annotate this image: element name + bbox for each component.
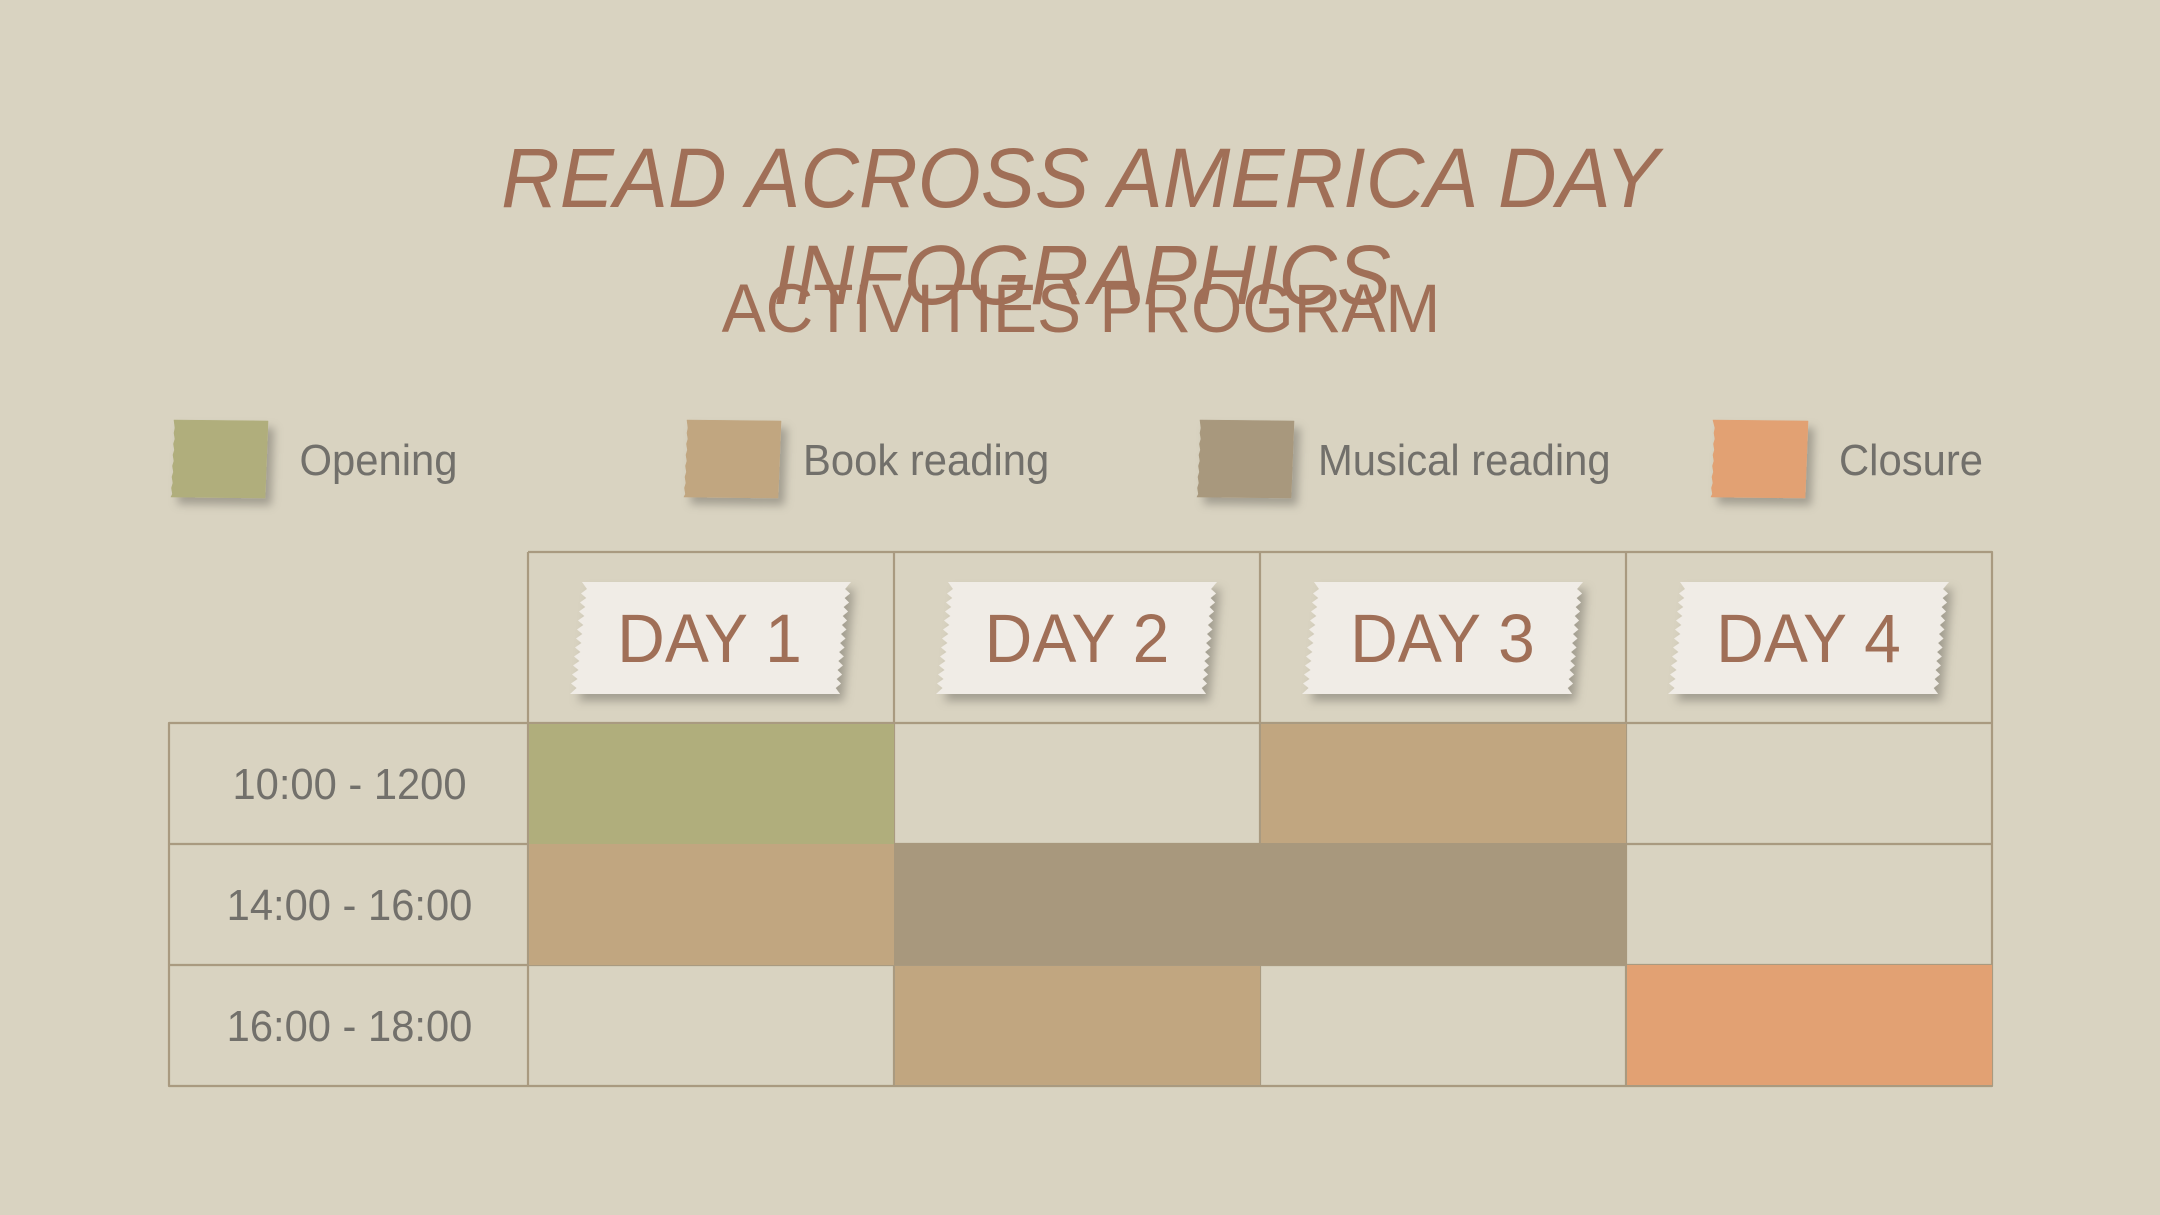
day 4 header: [1668, 582, 1949, 694]
legend: [171, 420, 1983, 498]
legend item: Opening: Opening: [300, 436, 457, 485]
day 2 header: [936, 582, 1217, 694]
legend item: Opening: [171, 420, 457, 498]
cell: day 2 book reading: [895, 966, 1260, 1085]
day 3 header: [1302, 582, 1583, 694]
table grid: [169, 552, 1992, 1086]
activity cells: [529, 724, 1992, 1085]
time labels: 10:00 - 1200: [232, 760, 467, 809]
legend item: Closure: Closure: [1839, 436, 1983, 485]
day 1 header: [570, 582, 851, 694]
title: INFOGRAPHICS: [773, 227, 1391, 322]
legend item: Book reading: [684, 420, 1049, 498]
day 3 header: DAY 3: [1350, 601, 1535, 677]
time labels: 14:00 - 16:00: [227, 881, 472, 930]
legend item: Book reading: Book reading: [803, 436, 1049, 485]
time labels: 16:00 - 18:00: [227, 1002, 472, 1051]
day 1 header: DAY 1: [617, 601, 802, 677]
cell: day 1 opening: [529, 724, 894, 844]
title: [501, 130, 1664, 322]
cell: day 3 book reading: [1261, 724, 1626, 844]
legend item: Closure: [1711, 420, 1983, 498]
legend item: Musical reading: Musical reading: [1318, 436, 1611, 485]
legend item: Musical reading: [1197, 420, 1611, 498]
time labels: [227, 760, 472, 1051]
cell: day 1 book reading: [529, 844, 894, 965]
schedule table: [169, 552, 1992, 1086]
day 2 header: DAY 2: [985, 601, 1169, 677]
title: READ ACROSS AMERICA DAY: [501, 130, 1664, 225]
subtitle: ACTIVITIES PROGRAM: [722, 271, 1440, 347]
cell: day 4 closure: [1627, 965, 1992, 1085]
cell: day 2-3 musical reading: [894, 843, 1627, 965]
day 4 header: DAY 4: [1716, 601, 1901, 677]
